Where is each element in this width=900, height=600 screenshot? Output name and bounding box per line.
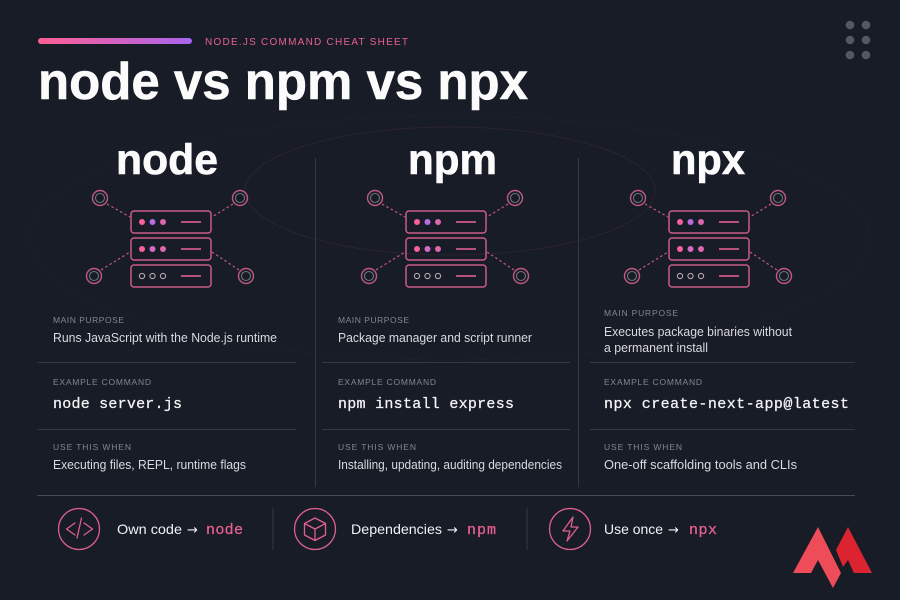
arrow: →	[187, 523, 198, 538]
use this when block: USE THIS WHEN	[604, 442, 682, 452]
main purpose block	[604, 308, 793, 355]
decorative dot grid icon	[846, 21, 870, 59]
main purpose block: Executes package binaries without	[604, 325, 793, 339]
icon: code	[58, 508, 100, 550]
example command block: node server.js	[53, 396, 182, 413]
heading: npm: npm	[408, 136, 497, 184]
main purpose block	[53, 315, 277, 345]
dependencies label: Dependencies	[351, 521, 442, 537]
example command block: EXAMPLE COMMAND	[53, 377, 151, 387]
main purpose block: Runs JavaScript with the Node.js runtime	[53, 331, 277, 345]
icon: npx server network	[624, 190, 792, 287]
example command block: EXAMPLE COMMAND	[604, 377, 702, 387]
use this when block	[604, 442, 797, 472]
example command block	[53, 377, 182, 413]
footer: dependencies	[294, 508, 496, 550]
arrow: →	[668, 523, 679, 538]
main purpose block: Package manager and script runner	[338, 331, 532, 345]
use once label: Use once	[604, 521, 663, 537]
main purpose block: MAIN PURPOSE	[604, 308, 678, 318]
header accent bar	[38, 38, 192, 44]
use this when block	[338, 442, 562, 472]
command: node: node	[206, 522, 243, 539]
panel: npx	[590, 136, 855, 472]
main purpose block: MAIN PURPOSE	[53, 315, 124, 325]
heading: node: node	[116, 136, 218, 184]
example command block	[338, 377, 514, 413]
icon: node server network	[86, 190, 254, 287]
example command block: npx create-next-app@latest	[604, 396, 849, 413]
icon: npm server network	[362, 190, 528, 287]
example command block: EXAMPLE COMMAND	[338, 377, 436, 387]
panel: npm	[322, 136, 570, 472]
icon: package box	[294, 508, 336, 550]
use this when block: Installing, updating, auditing dependencies	[338, 458, 562, 472]
logo	[793, 527, 872, 588]
footer: use once	[550, 508, 717, 550]
main purpose block	[338, 315, 532, 345]
main purpose block: MAIN PURPOSE	[338, 315, 409, 325]
use this when block: USE THIS WHEN	[338, 442, 416, 452]
main purpose block: a permanent install	[604, 341, 708, 355]
heading: npx: npx	[671, 136, 745, 184]
own code label: Own code	[117, 521, 182, 537]
eyebrow label: NODE.JS COMMAND CHEAT SHEET	[205, 37, 408, 48]
arrow: →	[447, 523, 458, 538]
use this when block	[53, 442, 246, 472]
use this when block: Executing files, REPL, runtime flags	[53, 458, 246, 472]
example command block	[604, 377, 849, 413]
footer: own code	[58, 508, 243, 550]
example command block: npm install express	[338, 396, 514, 413]
use this when block: One-off scaffolding tools and CLIs	[604, 458, 797, 472]
title: node vs npm vs npx	[38, 53, 528, 111]
icon: lightning bolt	[550, 508, 590, 550]
use this when block: USE THIS WHEN	[53, 442, 131, 452]
panel: node	[37, 136, 296, 472]
command: npm: npm	[467, 522, 496, 539]
command: npx: npx	[689, 522, 717, 539]
